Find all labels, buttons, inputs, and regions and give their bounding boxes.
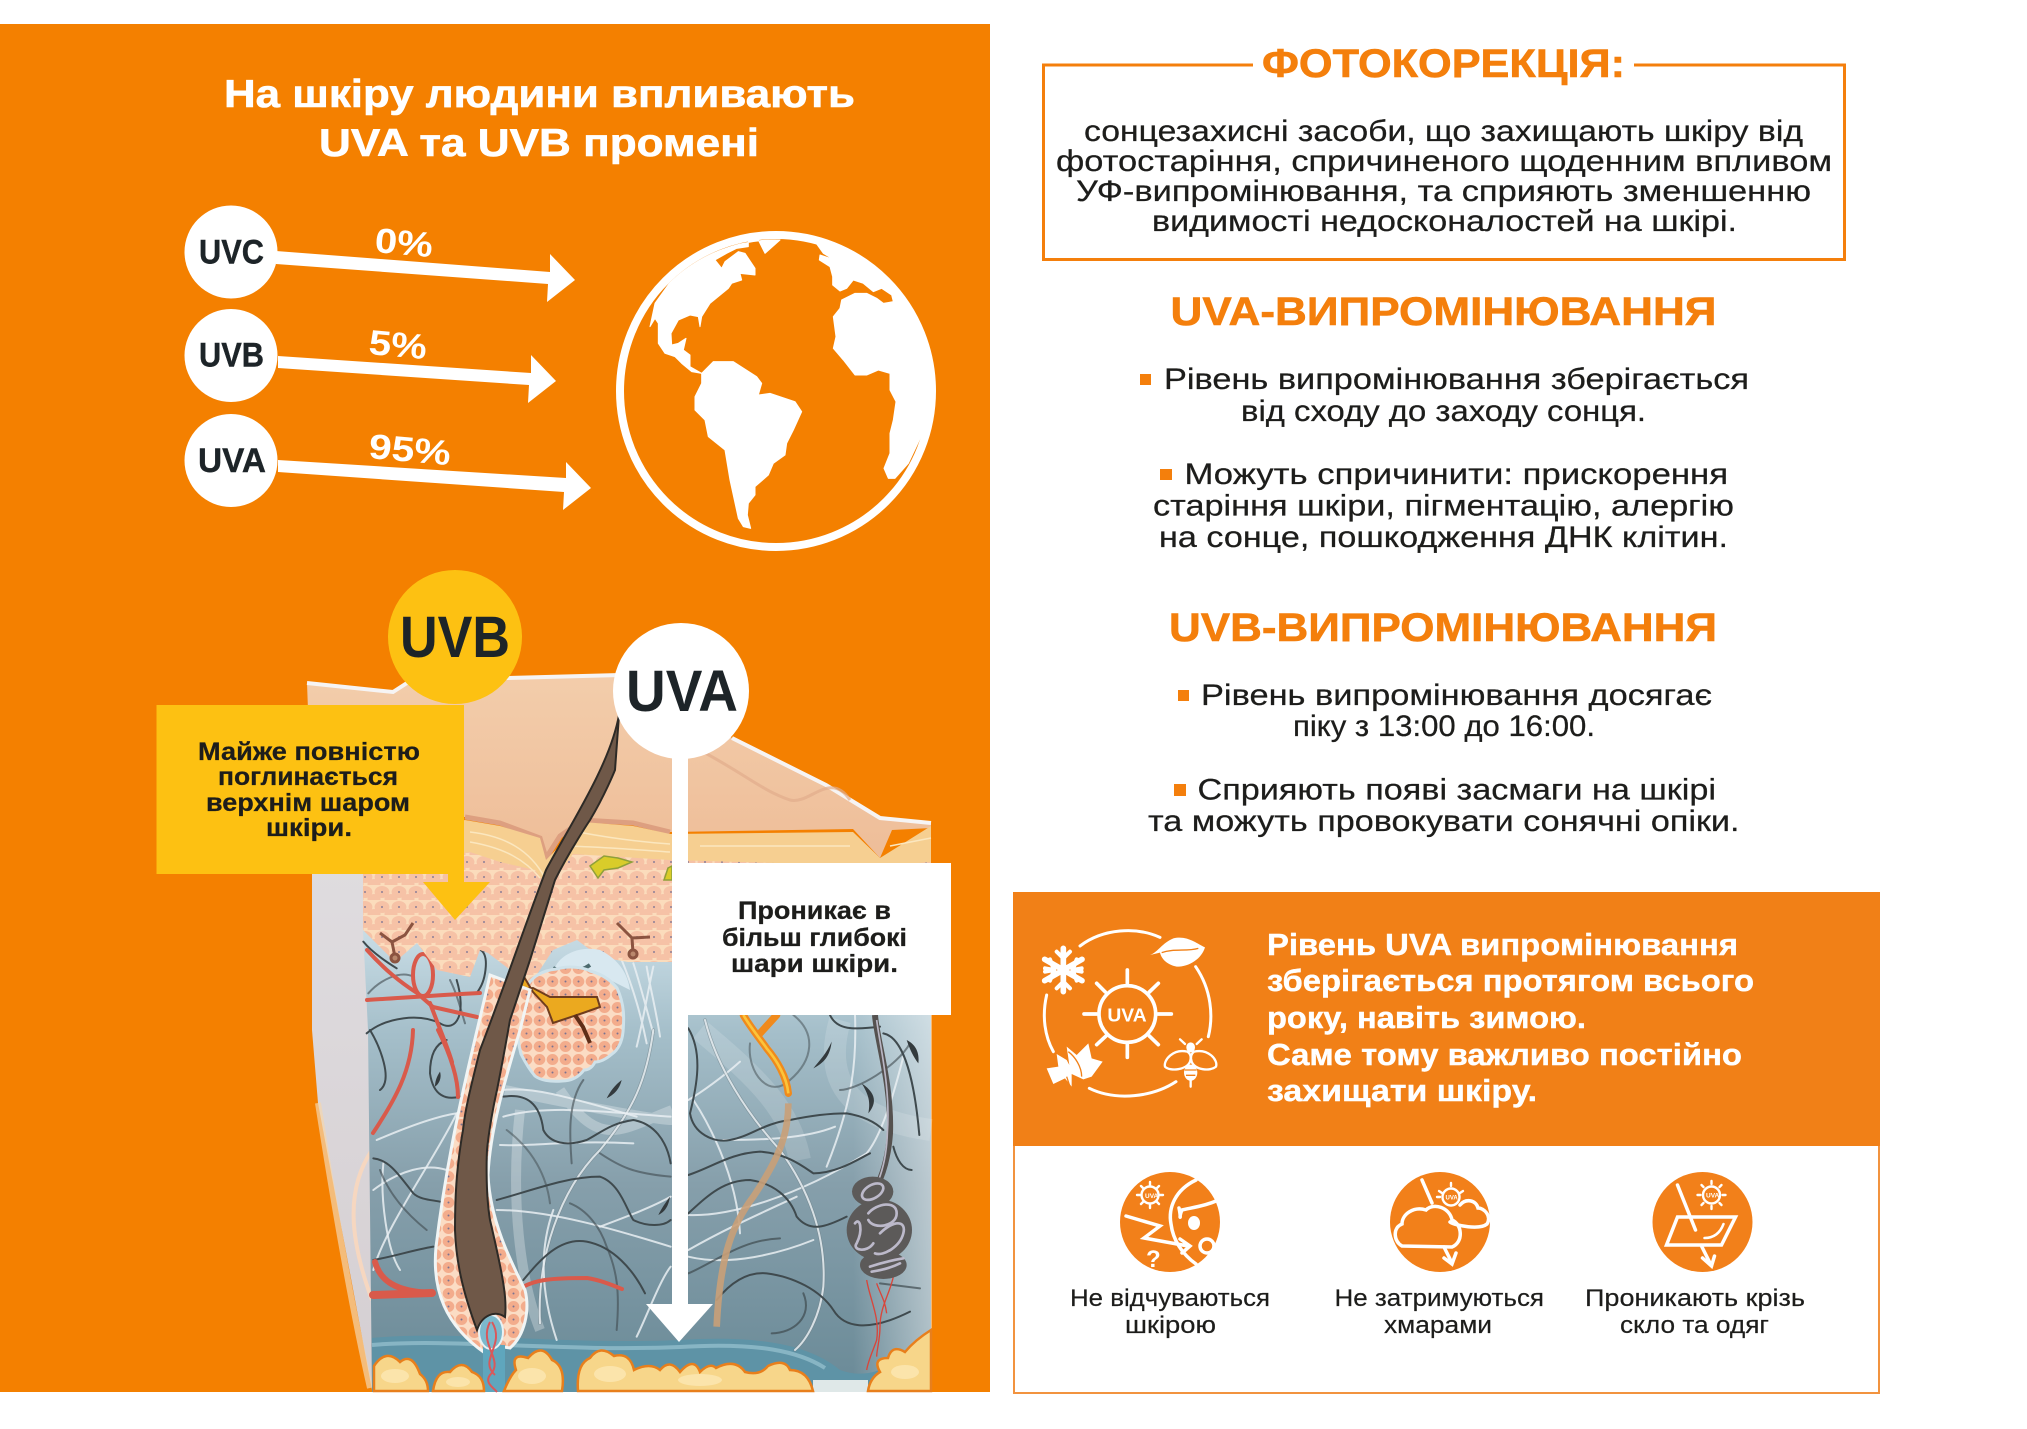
icon: head with sun xyxy=(1120,1172,1220,1273)
fibres: connective tissue, left part xyxy=(370,1030,671,1340)
UVC ray: UVC xyxy=(199,234,264,272)
heading: UVA radiation: UVA-ВИПРОМІНЮВАННЯ xyxy=(1170,290,1716,334)
UVC ray xyxy=(184,206,575,302)
title: UVA та UVB промені xyxy=(319,122,759,165)
callout: UVA note: більш глибокі xyxy=(722,924,907,952)
bullet: peak time: Рівень випромінювання досягає xyxy=(1201,679,1712,712)
all-year text xyxy=(1267,927,1754,1108)
UVB beam arrow xyxy=(423,870,490,920)
UVA ray: UVA xyxy=(198,442,266,480)
UVC ray: 0% xyxy=(373,221,434,265)
illustration: skin cross-section xyxy=(156,570,951,1392)
callout: UVB note: шкіри. xyxy=(266,814,352,842)
fibres: upper dermis xyxy=(363,942,660,1047)
heading: photocorrection: ФОТОКОРЕКЦІЯ: xyxy=(1262,42,1625,86)
red vessels xyxy=(367,950,622,1295)
UVA ray xyxy=(184,414,591,510)
thin red vessels xyxy=(867,1277,893,1370)
yellow horny layer xyxy=(363,820,931,887)
label: through glass and clothes: скло та одяг xyxy=(1620,1312,1769,1339)
UVB ray: 5% xyxy=(367,323,428,367)
bullet: tanning and burns: та можуть провокувати сонячні опіки. xyxy=(1148,805,1740,838)
pale halo above the gland xyxy=(553,949,630,990)
UVA badge: UVA xyxy=(626,659,738,724)
fibres: connective tissue, right part xyxy=(688,1015,920,1370)
all-year text: захищати шкіру. xyxy=(1267,1073,1537,1108)
bullet: effects: Можуть спричинити: прискорення xyxy=(1184,458,1728,491)
UVB badge xyxy=(388,570,522,704)
icon: globe xyxy=(620,235,932,547)
callout: UVA note xyxy=(672,863,951,1015)
fat lobes xyxy=(374,1330,931,1391)
panel: UVA all year xyxy=(1013,892,1880,1393)
section: UVB radiation xyxy=(1148,606,1740,838)
bullet: effects xyxy=(1153,458,1734,554)
callout: UVA note: шари шкіри. xyxy=(731,950,898,978)
all-year text: зберігається протягом всього xyxy=(1267,963,1754,998)
callout: UVB note: верхнім шаром xyxy=(206,789,410,817)
icon: glass with sun: UVA xyxy=(1706,1192,1720,1200)
top skin surface xyxy=(307,675,931,860)
dermis xyxy=(363,930,932,1392)
orange nerve ending xyxy=(743,1015,788,1093)
icon: head with sun: ? xyxy=(1146,1246,1161,1273)
deep dermis band xyxy=(372,1335,931,1392)
icon: seasons and UVA sun: UVA xyxy=(1107,1004,1147,1025)
sebaceous gland xyxy=(513,967,624,1081)
label: through glass and clothes xyxy=(1585,1285,1805,1339)
label: not blocked by clouds xyxy=(1334,1285,1544,1339)
label: not felt by skin xyxy=(1070,1285,1270,1339)
bullet: peak time xyxy=(1178,679,1712,743)
icon: glass with sun xyxy=(1652,1172,1752,1272)
all-year text: Саме тому важливо постійно xyxy=(1267,1037,1742,1072)
icon: clouds with sun: UVA xyxy=(1446,1196,1458,1202)
bullet: tanning and burns xyxy=(1148,774,1740,838)
ray chart: share of rays reaching the Earth xyxy=(184,206,591,510)
bullet: effects: на сонце, пошкодження ДНК клітин. xyxy=(1159,521,1728,554)
heading: UVB radiation: UVB-ВИПРОМІНЮВАННЯ xyxy=(1169,606,1717,650)
bullet: tanning and burns: Сприяють появі засмаги на шкірі xyxy=(1198,774,1716,806)
callout: UVA note: Проникає в xyxy=(738,897,891,925)
UVB ray xyxy=(184,309,556,403)
nerve xyxy=(717,1103,788,1327)
icon: head with sun: UVA xyxy=(1145,1193,1159,1200)
UVA ray: 95% xyxy=(367,427,452,473)
title: На шкіру людини впливають xyxy=(224,73,855,116)
section: UVA radiation xyxy=(1140,290,1749,554)
icon: seasons and UVA sun xyxy=(1044,931,1216,1096)
bullet: duration: від сходу до заходу сонця. xyxy=(1241,395,1646,428)
hair follicle sheath xyxy=(435,975,530,1353)
dermal papilla channel xyxy=(479,1315,505,1392)
label: not blocked by clouds: Не затримуються xyxy=(1334,1285,1544,1312)
definition text: сонцезахисні засоби, що захищають шкіру від xyxy=(1084,115,1803,148)
melanocytes xyxy=(380,923,650,962)
bullet: duration: Рівень випромінювання зберігається xyxy=(1164,363,1749,396)
UVB badge: UVB xyxy=(400,605,510,670)
feature: through glass and clothes xyxy=(1585,1172,1805,1339)
callout: UVB note: поглинається xyxy=(218,763,398,791)
bullet: duration xyxy=(1140,363,1749,428)
yellow Langerhans cells xyxy=(590,856,672,880)
definition text: видимості недосконалостей на шкірі. xyxy=(1152,205,1737,238)
all-year text: Рівень UVA випромінювання xyxy=(1267,927,1738,962)
label: not felt by skin: шкірою xyxy=(1125,1312,1216,1339)
callout: UVB note: Майже повністю xyxy=(198,738,420,766)
UVB ray: UVB xyxy=(199,336,264,374)
panel: left orange background xyxy=(0,24,990,1392)
UVA badge xyxy=(613,623,749,759)
definition text: УФ-випромінювання, та сприяють зменшенню xyxy=(1076,175,1811,208)
definition text xyxy=(1056,115,1832,238)
skin side wall xyxy=(312,860,385,1390)
epidermis xyxy=(363,850,931,985)
hair shaft xyxy=(455,715,619,1330)
label: not blocked by clouds: хмарами xyxy=(1384,1312,1492,1339)
title xyxy=(224,73,855,165)
feature: not felt by skin xyxy=(1070,1172,1270,1339)
bullet: peak time: піку з 13:00 до 16:00. xyxy=(1293,710,1595,743)
label: not felt by skin: Не відчуваються xyxy=(1070,1285,1270,1312)
icon: clouds with sun xyxy=(1390,1172,1490,1272)
label: through glass and clothes: Проникають крізь xyxy=(1585,1285,1805,1312)
bullet: effects: старіння шкіри, пігментацію, алергію xyxy=(1153,490,1734,522)
sweat duct xyxy=(875,1015,890,1187)
callout: UVB note xyxy=(156,705,464,874)
definition text: фотостаріння, спричиненого щоденним впливом xyxy=(1056,145,1832,178)
feature: not blocked by clouds xyxy=(1334,1172,1544,1339)
all-year text: року, навіть зимою. xyxy=(1267,1000,1586,1035)
sweat gland coil xyxy=(847,1177,912,1279)
UVA beam arrow xyxy=(646,740,713,1342)
panel: photocorrection definition xyxy=(1044,42,1844,260)
